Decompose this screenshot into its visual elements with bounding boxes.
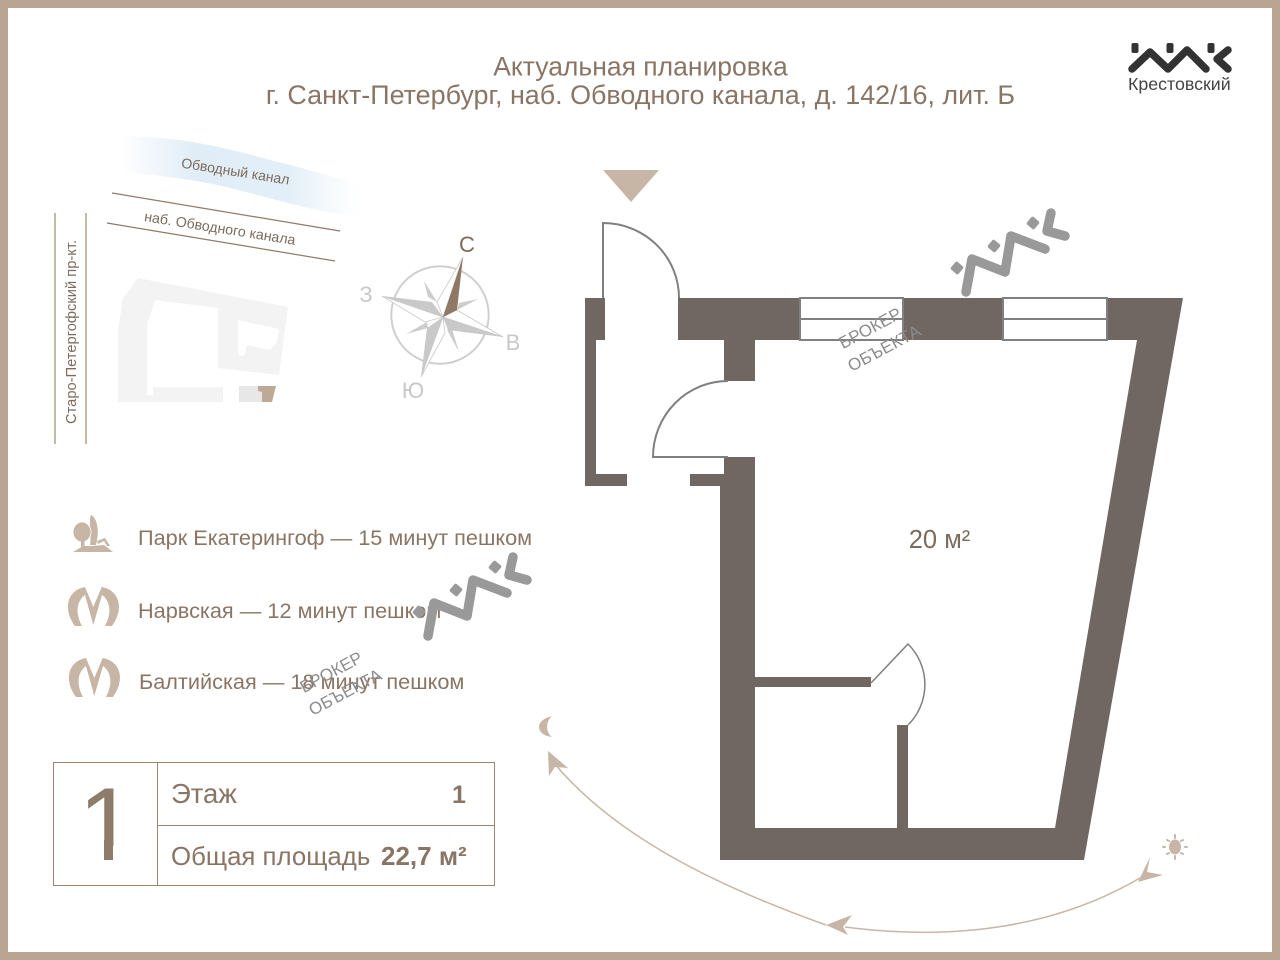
transport list: Парк Екатерингоф — 15 минут пешком (138, 525, 532, 550)
icon: metro Baltiyskaya (69, 658, 120, 697)
compass rose: Ю (402, 378, 424, 403)
logo: Krestovsky: Крестовский (1128, 74, 1231, 94)
watermark: logo over list (412, 557, 527, 636)
doors (603, 223, 925, 725)
watermark: broker label over plan (836, 304, 924, 376)
info table (54, 762, 494, 886)
neighbouring block (239, 386, 262, 402)
icon: metro Narvskaya (68, 587, 119, 626)
info table: 22,7 м² (381, 841, 467, 871)
canal label: Обводный канал (180, 155, 291, 188)
icon: moon (539, 716, 552, 737)
windows (800, 298, 1107, 340)
sun path arc (548, 751, 1163, 935)
compass rose: В (506, 330, 520, 355)
courtyard cut-out (238, 320, 279, 356)
watermark: broker label over plan: ОБЪЕКТА (845, 321, 924, 376)
logo: Krestovsky (1128, 43, 1231, 94)
info table: Общая площадь (171, 843, 370, 871)
transport list: Нарвская — 12 минут пешком (138, 598, 441, 623)
site map (55, 137, 362, 444)
title (266, 52, 1015, 110)
embankment label: наб. Обводного канала (143, 209, 297, 249)
compass rose: З (359, 282, 373, 307)
avenue lines (55, 213, 86, 444)
arrow head middle (826, 915, 852, 935)
icon: sun (1163, 835, 1187, 859)
watermark: broker label over plan: БРОКЕР (836, 304, 905, 353)
title: г. Санкт-Петербург, наб. Обводного канала, д. 142/16, лит. Б (266, 80, 1015, 110)
room area: 20 м² (909, 526, 970, 554)
transport list (138, 525, 532, 694)
compass rose (359, 232, 520, 403)
title: Актуальная планировка (493, 52, 788, 82)
canal water (122, 137, 362, 216)
floor number (88, 788, 114, 860)
icon: park (73, 515, 113, 552)
building block (118, 278, 288, 402)
floor number: 1 (78, 767, 136, 883)
watermark: broker label over list: БРОКЕР (297, 648, 366, 697)
arrow head near sun (1138, 857, 1163, 882)
highlighted building part (258, 386, 276, 402)
floor plan (585, 223, 1183, 860)
transport list: Балтийская — 18 минут пешком (139, 669, 464, 694)
entrance marker (603, 170, 659, 202)
walls (585, 298, 1183, 860)
avenue label: Старо-Петергофский пр-кт. (64, 240, 80, 424)
info table: 1 (452, 781, 466, 809)
watermark: logo over plan (950, 213, 1065, 292)
embankment lines (107, 193, 340, 261)
watermark: broker label over list (297, 648, 385, 720)
watermark: broker label over list: ОБЪЕКТА (306, 665, 385, 720)
info table: Этаж (171, 778, 237, 809)
compass letters: С (459, 232, 475, 257)
arrow head near moon (548, 751, 568, 776)
